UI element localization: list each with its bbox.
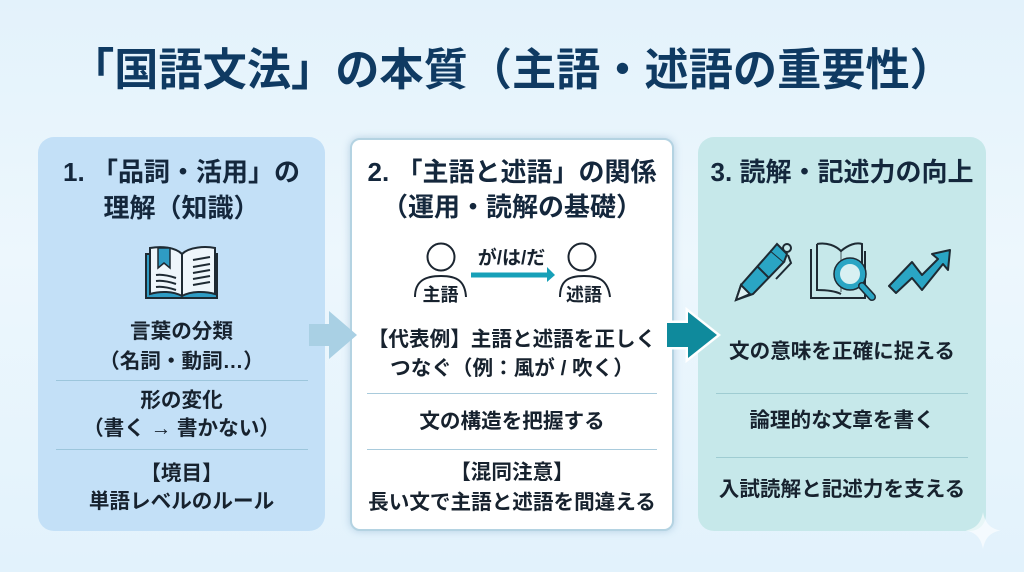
text: representative example: つなぐ（例：風が / 吹く） — [390, 357, 634, 380]
text: word classification: 言葉の分類 — [130, 320, 233, 343]
text: write logically: 論理的な文章を書く — [749, 409, 935, 432]
text: representative example — [368, 328, 656, 380]
heading: panel 2: （運用・読解の基礎） — [382, 192, 642, 222]
text: form change: （書く → 書かない） — [83, 417, 280, 440]
heading: panel 2: 2. 「主語と述語」の関係 — [368, 157, 656, 187]
heading: panel 2 — [368, 157, 656, 222]
text: confusion caution: 【混同注意】 — [450, 461, 574, 484]
heading: panel 1 — [63, 157, 300, 223]
text: grasp structure: 文の構造を把握する — [419, 410, 605, 433]
arrow: panel 2 to 3 — [667, 307, 721, 363]
icon: pen — [734, 242, 792, 302]
diagram: subject to predicate: 主語 — [422, 285, 458, 305]
text: entrance exams: 入試読解と記述力を支える — [719, 478, 965, 501]
diagram: subject to predicate: 述語 — [566, 285, 602, 305]
panel: 2 subject and predicate — [350, 138, 674, 531]
text: representative example: 【代表例】主語と述語を正しく — [368, 328, 656, 351]
text: confusion caution — [368, 461, 656, 514]
text: boundary — [89, 462, 274, 513]
panel: 1 parts of speech and conjugation — [38, 137, 325, 531]
heading: panel 1: 理解（知識） — [103, 193, 260, 223]
text: boundary: 【境目】 — [140, 462, 223, 485]
diagram: subject to predicate: が/は/だ — [478, 246, 545, 269]
heading: panel 3: 3. 読解・記述力の向上 — [711, 157, 973, 187]
panel: 3 reading and writing — [698, 137, 986, 531]
text: form change — [83, 389, 280, 440]
icon: book with magnifier — [810, 242, 876, 301]
title: 「国語文法」の本質（主語・述語の重要性） — [70, 46, 954, 95]
text: confusion caution: 長い文で主語と述語を間違える — [368, 491, 656, 514]
text: grasp meaning: 文の意味を正確に捉える — [729, 340, 955, 363]
text: word classification: （名詞・動詞…） — [99, 350, 264, 373]
text: form change: 形の変化 — [140, 389, 223, 412]
arrow: panel 1 to 2 — [309, 311, 357, 359]
icon: rising arrow — [888, 249, 951, 294]
text: word classification — [99, 320, 264, 373]
icon: sparkle — [966, 512, 999, 548]
text: boundary: 単語レベルのルール — [89, 490, 274, 513]
diagram: subject to predicate — [414, 242, 611, 305]
icon: open book — [145, 246, 218, 299]
heading: panel 1: 1. 「品詞・活用」の — [63, 157, 300, 187]
